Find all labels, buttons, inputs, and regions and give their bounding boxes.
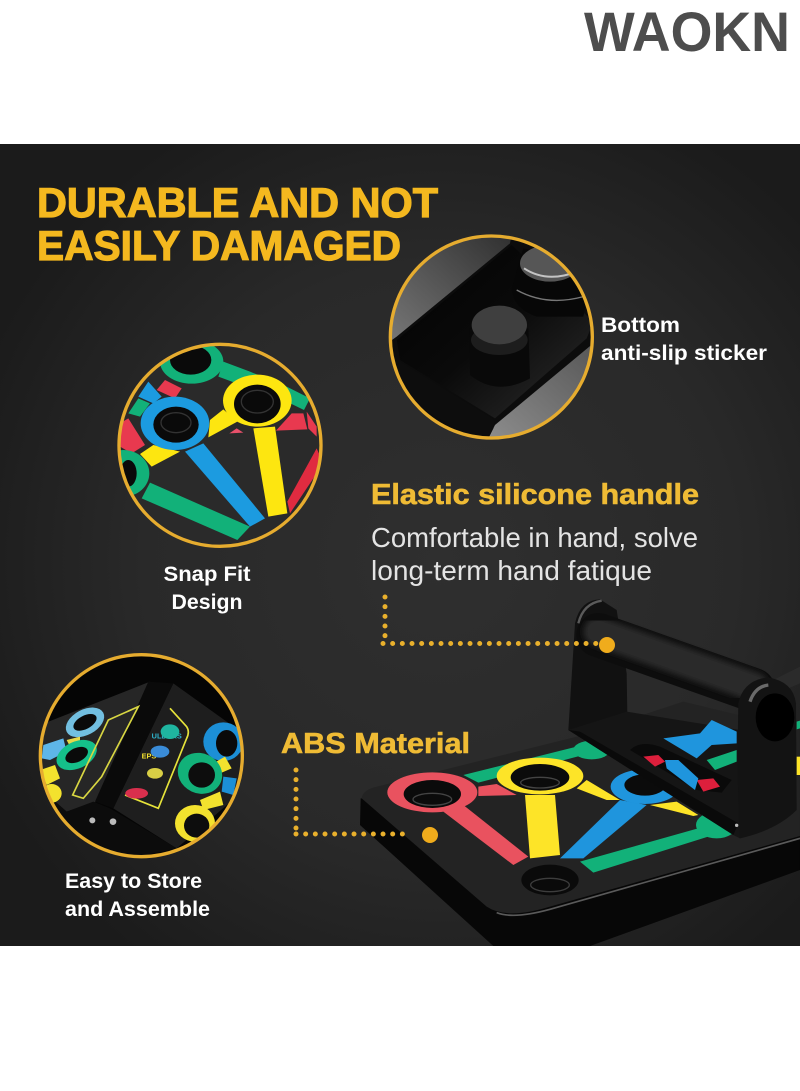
title: DURABLE AND NOT (37, 179, 438, 226)
board top face (362, 738, 800, 914)
green left ring (120, 450, 150, 495)
title: EASILY DAMAGED (37, 222, 401, 269)
rear peg (542, 295, 584, 316)
label: bottom anti-slip sticker (601, 314, 767, 365)
base plate (568, 712, 740, 838)
leader: handle callout (383, 597, 597, 644)
description: handle: long-term hand fatique (371, 555, 652, 586)
label: snap fit design: Design (172, 591, 242, 614)
label: easy to store and assemble (65, 870, 210, 921)
colors seen through handle (663, 720, 737, 758)
bottom hole (521, 865, 579, 895)
label: bottom anti-slip sticker: Bottom (601, 314, 680, 337)
label: snap fit design: Snap Fit (164, 563, 250, 586)
title (37, 179, 438, 269)
yellow ring (223, 375, 292, 427)
marker: ABS material callout dot (422, 827, 438, 843)
red bars (478, 784, 517, 796)
board side (360, 798, 800, 946)
marker: handle callout dot (599, 637, 615, 653)
right legend (125, 708, 188, 808)
blue bar (560, 800, 647, 858)
dark background panel (0, 144, 800, 946)
blue bar (185, 443, 265, 527)
plate opening (630, 744, 732, 793)
label: easy to store and assemble: and Assemble (65, 898, 210, 921)
circle: easy to store detail (38, 653, 244, 858)
rear bar of handle (760, 667, 800, 693)
label: bottom anti-slip sticker: anti-slip sticker (601, 342, 767, 365)
back post cap (578, 601, 602, 623)
yellow bar (253, 427, 287, 517)
red ring (387, 772, 477, 812)
brand logo: WAOKN (584, 0, 790, 63)
front rim highlight (497, 838, 800, 915)
heading: ABS material: ABS Material (281, 728, 470, 760)
yellow arms (208, 409, 237, 437)
right color strip (797, 721, 800, 729)
circle: bottom anti-slip sticker detail (388, 234, 594, 440)
description: handle: Comfortable in hand, solve (371, 522, 698, 553)
left legend (73, 707, 138, 798)
handle opening (756, 693, 794, 741)
yellow bars (577, 780, 620, 800)
left rings (66, 708, 104, 738)
screws (89, 817, 95, 823)
green bar (142, 483, 250, 540)
circle: snap fit design detail (117, 342, 323, 548)
right rings (203, 722, 243, 761)
blue ring (141, 397, 209, 450)
heading: elastic silicone handle: Elastic silicone handle (371, 479, 699, 511)
front peg (478, 338, 530, 386)
description: handle (371, 522, 698, 586)
label: snap fit design (164, 563, 250, 614)
plate lower strip (568, 730, 738, 835)
circle: easy to store detail: ULDERS (152, 731, 182, 740)
leader: ABS material callout (296, 770, 412, 834)
blue ring (610, 770, 673, 804)
yellow ring (497, 758, 583, 794)
label: easy to store and assemble: Easy to Store (65, 870, 202, 893)
back post (568, 599, 627, 733)
product: push-up board with handle (360, 599, 800, 946)
green bars (463, 747, 583, 783)
top green ring (160, 346, 224, 384)
silicone grip (598, 632, 753, 690)
circle: easy to store detail: EPS (142, 751, 156, 760)
front post (738, 677, 797, 838)
